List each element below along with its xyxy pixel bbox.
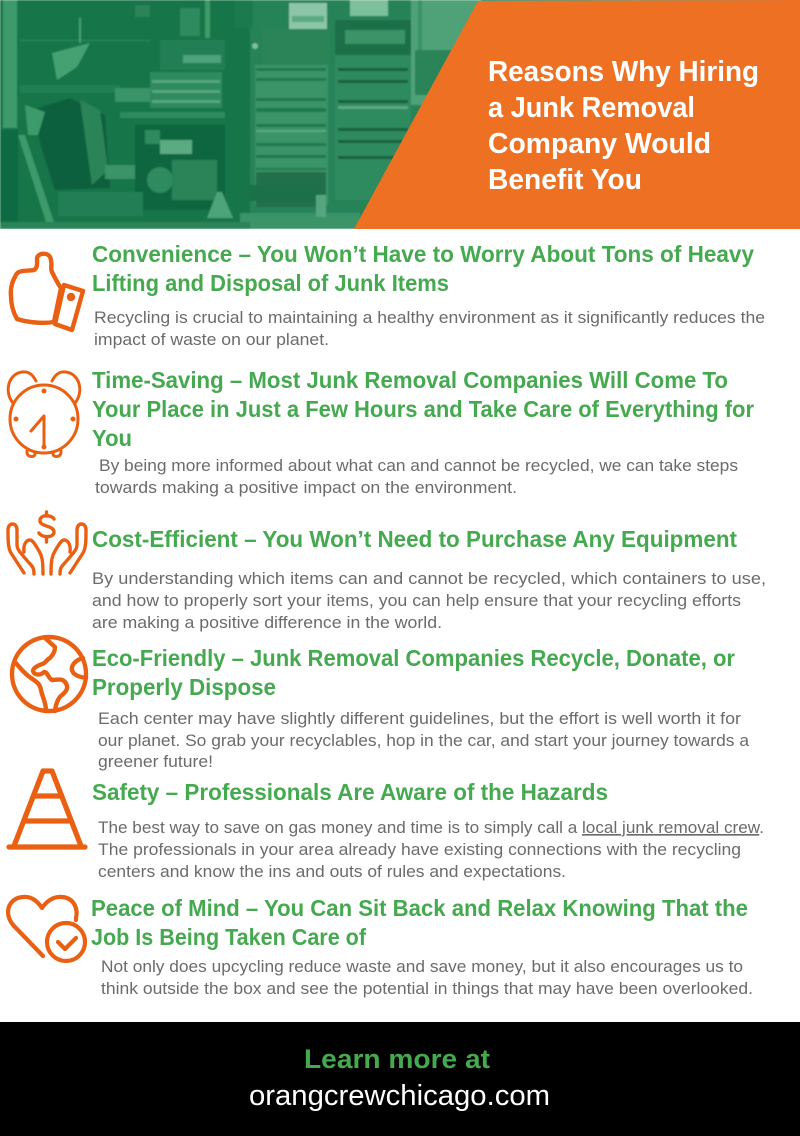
body text bbox=[98, 710, 750, 771]
body text bbox=[101, 958, 753, 998]
heading: Cost-Efficient – You Won’t Need to Purchase Any Equipment bbox=[92, 526, 737, 552]
heading: Safety – Professionals Are Aware of the Hazards bbox=[92, 779, 608, 805]
icon: traffic cone bbox=[9, 771, 85, 847]
footer band bbox=[0, 1022, 800, 1136]
body text: and how to properly sort your items, you can help ensure that your recycling efforts bbox=[92, 592, 741, 610]
body text: our planet. So grab your recyclables, hop in the car, and start your journey towards a bbox=[98, 732, 750, 750]
body text: Each center may have slightly different guidelines, but the effort is well worth it for bbox=[98, 710, 742, 728]
section: peace of mind bbox=[8, 895, 753, 998]
footer call to action: Learn more at bbox=[304, 1044, 490, 1074]
orange title banner bbox=[354, 0, 800, 229]
body text: think outside the box and see the potential in things that may have been overlooked. bbox=[101, 980, 753, 998]
title: Reasons Why Hiring bbox=[488, 56, 759, 88]
heading: Lifting and Disposal of Junk Items bbox=[92, 270, 449, 296]
title bbox=[488, 56, 759, 196]
heading: Job Is Being Taken Care of bbox=[91, 924, 366, 950]
body text: By being more informed about what can and cannot be recycled, we can take steps bbox=[99, 457, 738, 475]
icon: hands with dollar sign bbox=[8, 512, 86, 574]
body text: By understanding which items can and cannot be recycled, which containers to use, bbox=[92, 570, 766, 588]
heading bbox=[92, 241, 754, 296]
footer website: orangcrewchicago.com bbox=[249, 1080, 550, 1112]
section: time-saving bbox=[8, 367, 754, 497]
heading bbox=[92, 645, 735, 700]
body text: impact of waste on our planet. bbox=[94, 331, 329, 349]
section: cost-efficient bbox=[8, 512, 766, 632]
body text: centers and know the ins and outs of rules and expectations. bbox=[98, 863, 566, 881]
heading bbox=[91, 895, 748, 950]
icon: heart with check bbox=[8, 897, 85, 961]
body text: greener future! bbox=[98, 753, 213, 771]
heading: You bbox=[92, 425, 132, 451]
body text: The best way to save on gas money and time is to simply call a local junk removal crew . bbox=[98, 819, 764, 837]
section: convenience bbox=[11, 241, 765, 349]
header photo: garage in green tint bbox=[0, 0, 800, 229]
heading: Your Place in Just a Few Hours and Take Care of Everything for bbox=[92, 396, 754, 422]
title: Benefit You bbox=[488, 164, 642, 196]
body text: towards making a positive impact on the environment. bbox=[95, 479, 517, 497]
section: safety bbox=[9, 771, 764, 881]
body text bbox=[92, 570, 766, 632]
title: Company Would bbox=[488, 128, 711, 160]
body text: Not only does upcycling reduce waste and save money, but it also encourages us to bbox=[101, 958, 743, 976]
icon: thumbs up bbox=[11, 254, 83, 330]
icon: alarm clock bbox=[8, 372, 80, 457]
heading: Properly Dispose bbox=[92, 674, 276, 700]
heading: Eco-Friendly – Junk Removal Companies Recycle, Donate, or bbox=[92, 645, 735, 671]
body text bbox=[98, 819, 764, 881]
heading: Convenience – You Won’t Have to Worry About Tons of Heavy bbox=[92, 241, 754, 267]
heading bbox=[92, 367, 754, 451]
icon: globe bbox=[12, 637, 86, 711]
heading: Peace of Mind – You Can Sit Back and Relax Knowing That the bbox=[91, 895, 748, 921]
body text: Recycling is crucial to maintaining a healthy environment as it significantly reduces the bbox=[94, 309, 765, 327]
body text: The professionals in your area already have existing connections with the recycling bbox=[98, 841, 741, 859]
body text bbox=[94, 309, 765, 349]
heading: Time-Saving – Most Junk Removal Companies Will Come To bbox=[92, 367, 728, 393]
body text: are making a positive difference in the world. bbox=[92, 614, 442, 632]
body text bbox=[95, 457, 738, 497]
title: a Junk Removal bbox=[488, 92, 695, 124]
section: eco-friendly bbox=[12, 637, 750, 771]
